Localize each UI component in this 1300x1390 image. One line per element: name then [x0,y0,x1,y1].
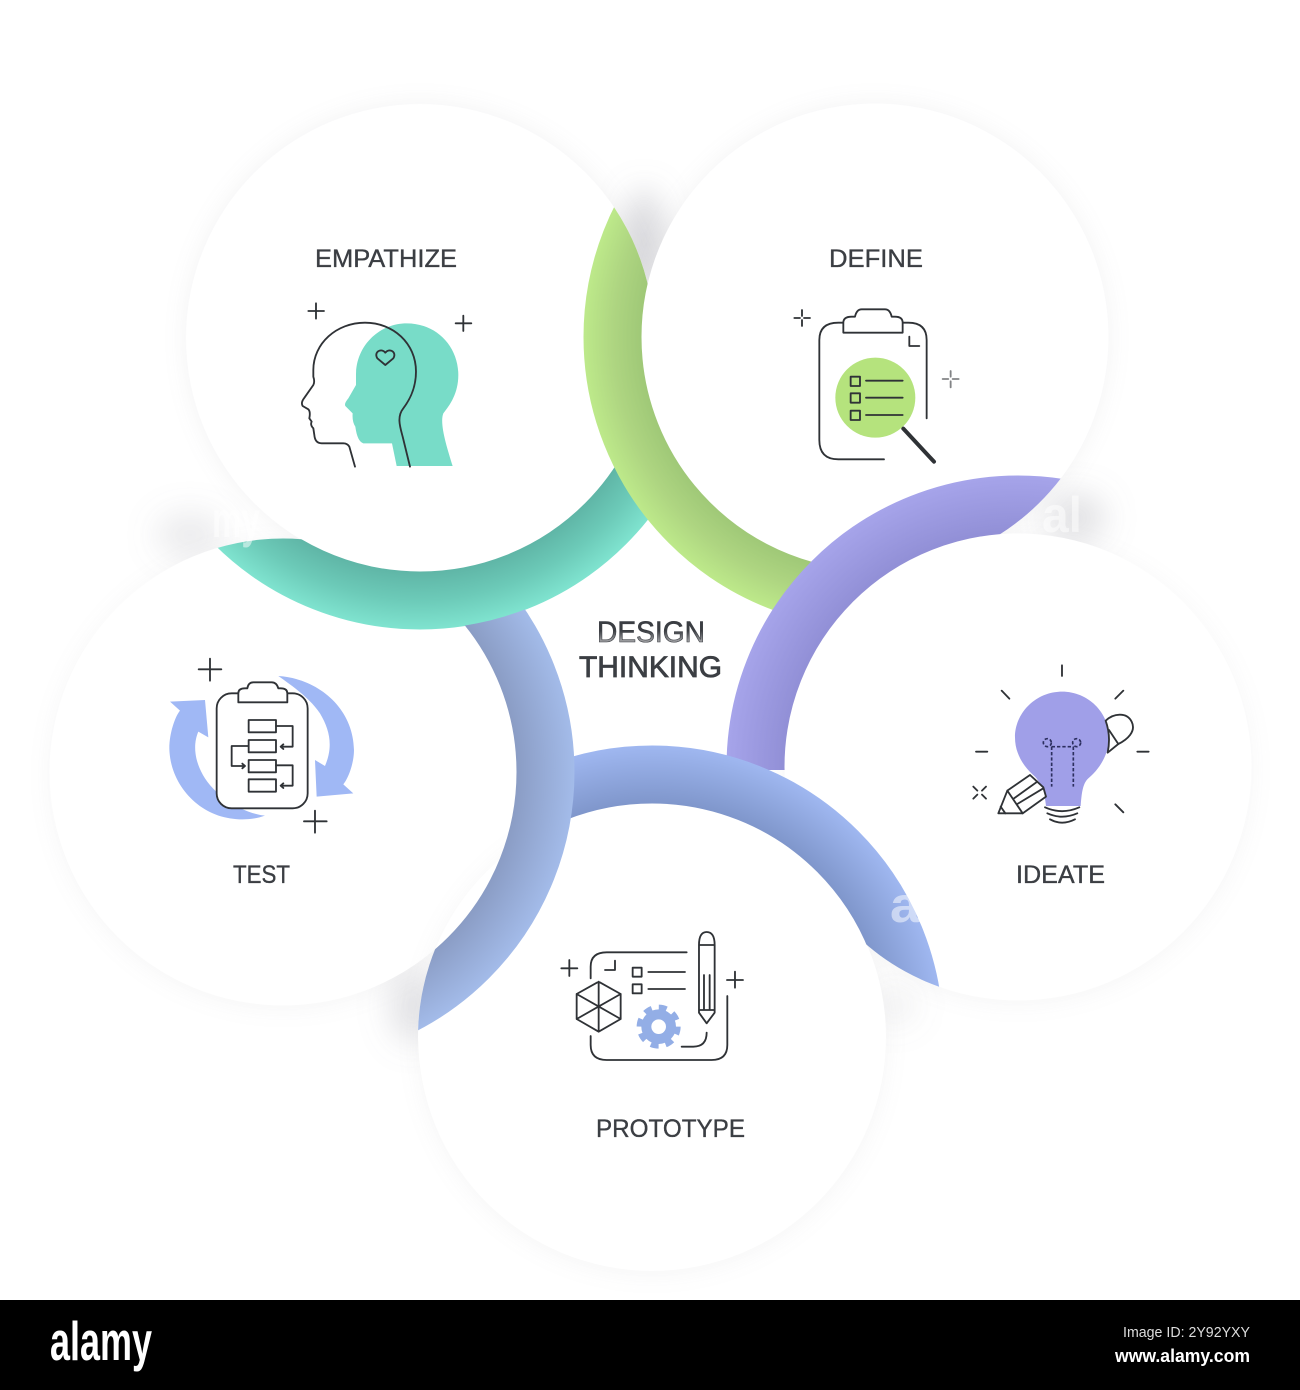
notch shadows [156,190,1105,1043]
icon: light bulb and pencil [973,665,1149,823]
label: empathize: EMPATHIZE [315,245,457,273]
footer logo: alamy [50,1310,152,1372]
footer bar [0,1300,1300,1390]
watermark fragments: my [212,492,260,548]
ring: green define [584,207,812,610]
icon: clipboard with magnifier [794,309,959,462]
label: prototype: PROTOTYPE [596,1115,745,1143]
ring: purple ideate [726,476,1060,770]
watermark fragments: a [890,877,921,933]
panel: prototype disc [418,803,886,1272]
icon: empathy heads [302,303,471,467]
label: ideate: IDEATE [1016,861,1105,889]
center title: THINKING [579,651,722,684]
ring: teal empathize [218,468,648,630]
watermark fragments [212,487,1082,933]
watermark fragments: al [1042,487,1082,543]
center title: DESIGN [597,616,705,649]
ring: blue prototype [570,746,940,987]
ring: slate blue test [418,610,574,1030]
footer image id: Image ID: 2Y92YXY [1123,1324,1250,1341]
label: define: DEFINE [829,245,923,273]
footer url: www.alamy.com [1114,1346,1250,1366]
center title [579,616,722,684]
icon: test clipboard with cycle arrows [169,659,354,833]
panel: prototype shadow on test disc [389,970,421,1150]
label: test: TEST [233,861,290,889]
panel: define disc [642,104,1108,570]
panel: empathize disc [186,104,654,572]
panel: test disc [50,538,516,1006]
panel: ideate disc [784,534,1252,1001]
icon: prototype blueprint [561,932,743,1060]
